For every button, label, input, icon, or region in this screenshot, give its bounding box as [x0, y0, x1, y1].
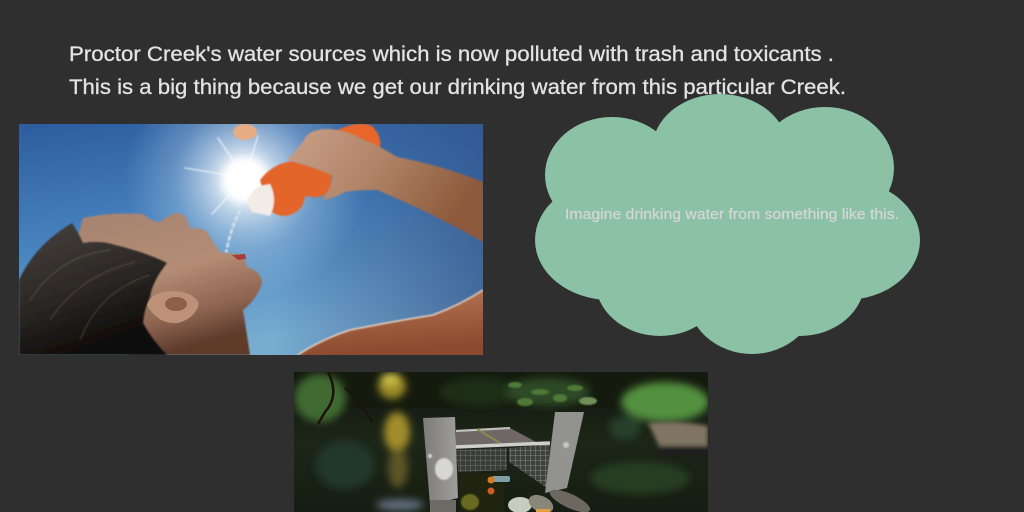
ear — [147, 291, 199, 323]
shoulder — [298, 290, 483, 355]
water stream — [226, 204, 244, 253]
callout text: Imagine drinking water from something like this. — [565, 207, 899, 223]
floating litter — [460, 474, 593, 512]
lips — [232, 254, 246, 260]
callout cloud — [535, 94, 920, 354]
heading text: This is a big thing because we get our drinking water from this particular Creek. — [69, 76, 846, 99]
face — [60, 213, 262, 355]
metal cage — [456, 428, 550, 488]
branches — [318, 372, 372, 424]
tree canopy — [294, 372, 708, 408]
hair — [19, 223, 167, 355]
overhanging leaves — [508, 382, 597, 406]
heading text — [69, 43, 846, 99]
photo: litter trap in Proctor Creek — [294, 372, 709, 512]
reflections — [315, 412, 690, 511]
heading text: Proctor Creek's water sources which is now polluted with trash and toxicants . — [69, 43, 834, 66]
metal plates — [423, 417, 458, 505]
arm and hand — [287, 129, 483, 242]
photo: woman drinking from a bottle under the sun — [19, 124, 483, 355]
bottle — [247, 124, 380, 216]
